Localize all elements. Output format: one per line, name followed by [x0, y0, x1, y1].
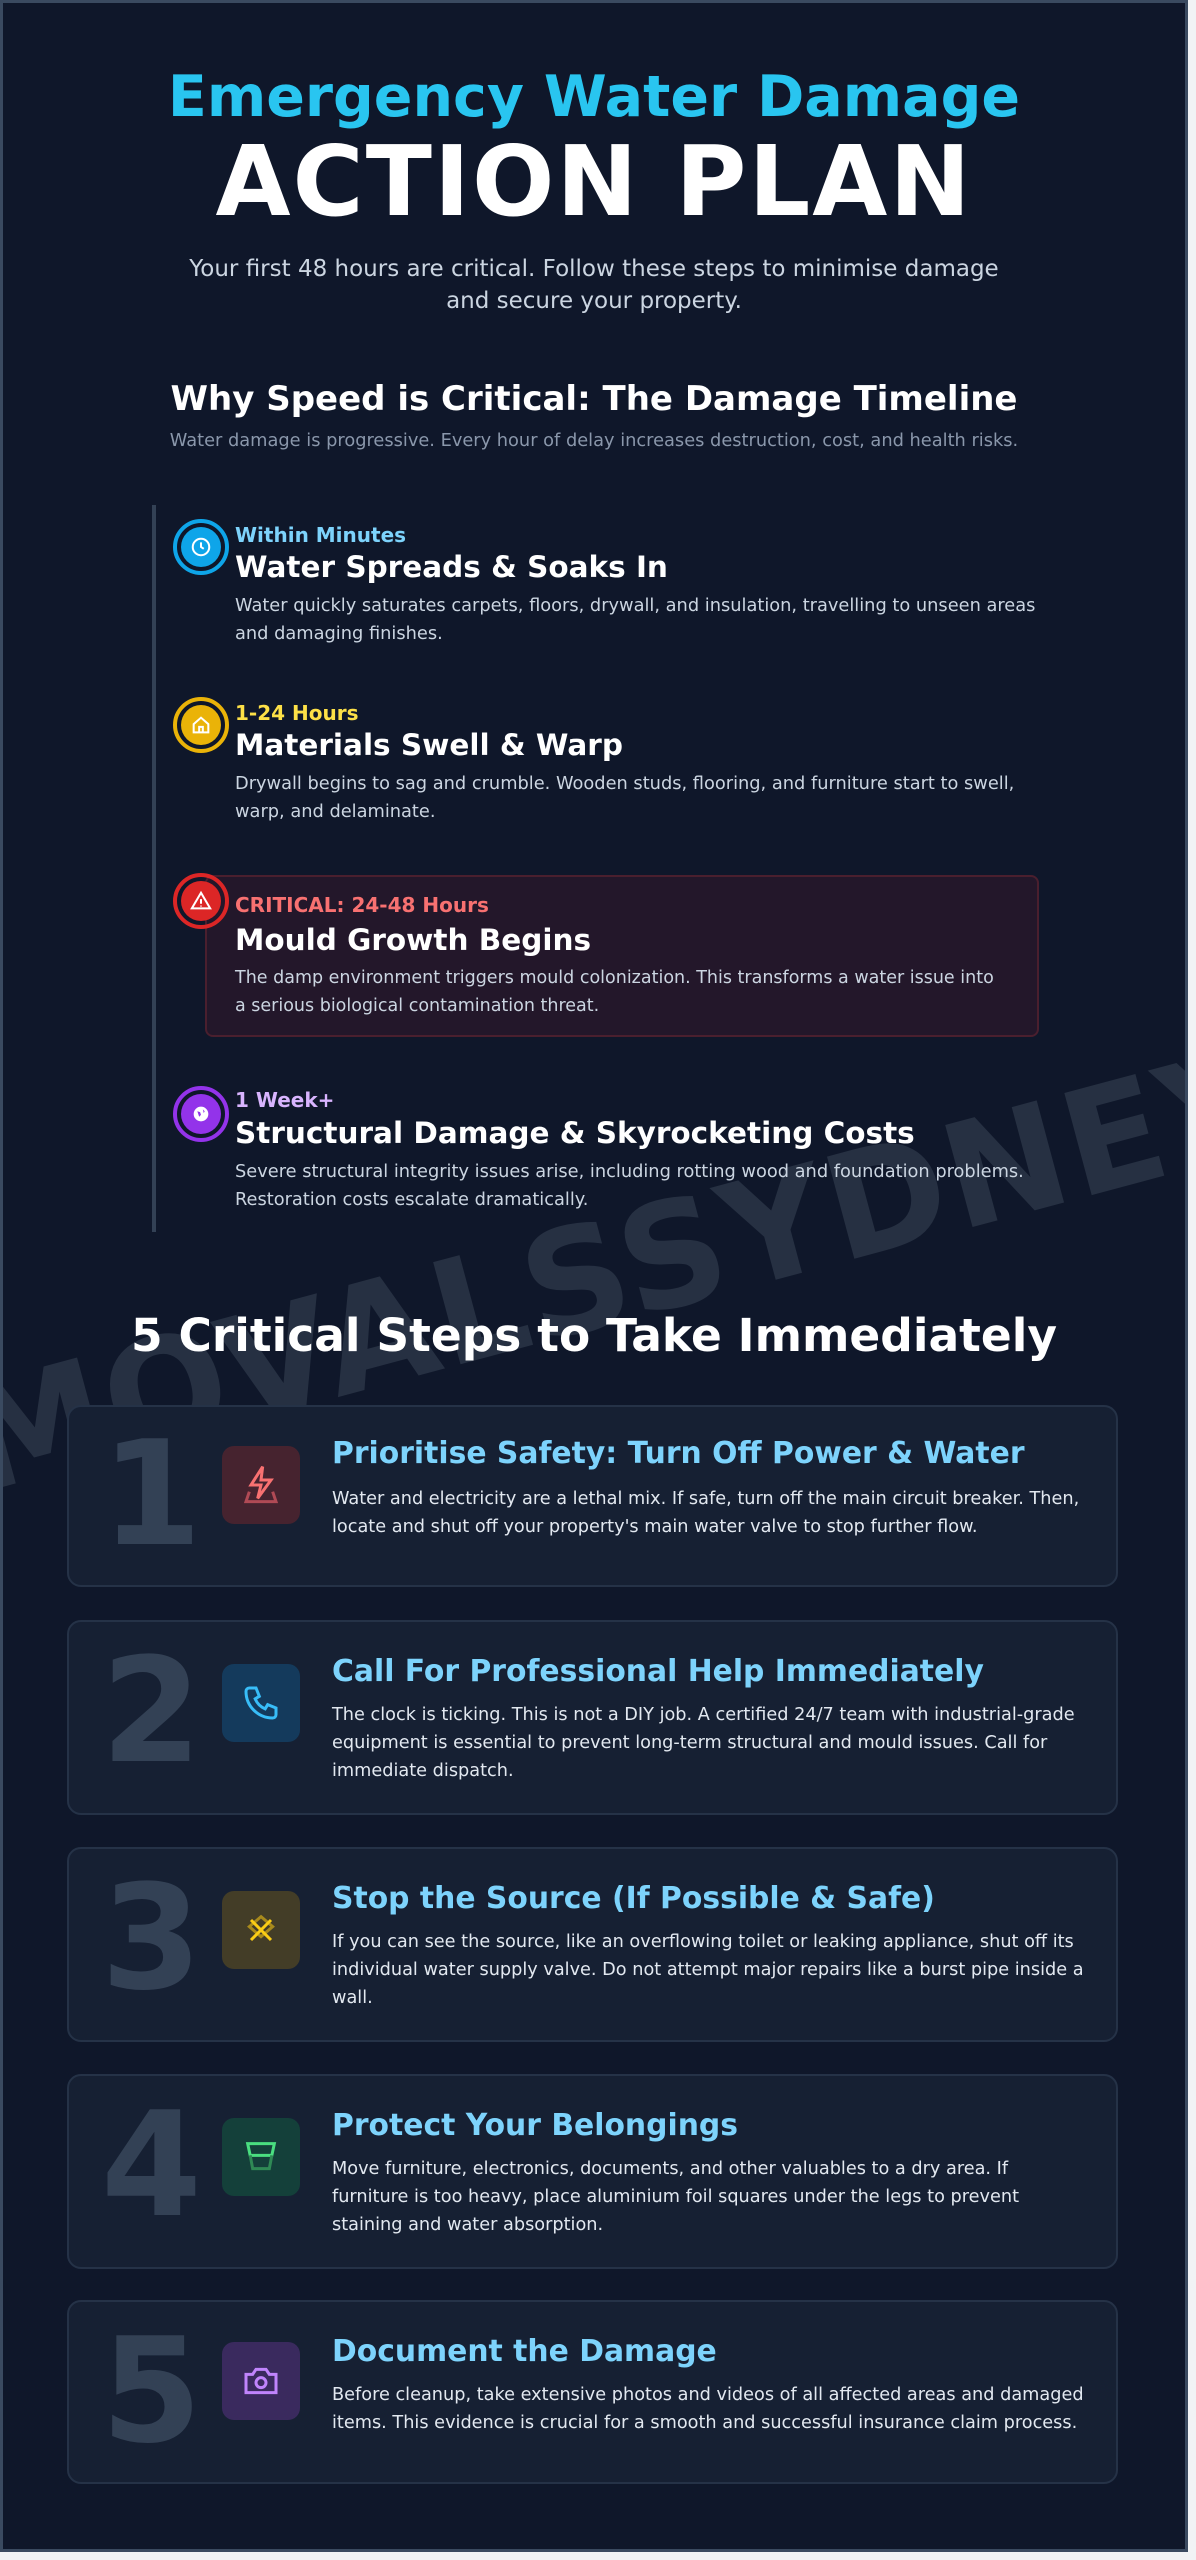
text: Before cleanup, take extensive photos and videos of all affected areas and damaged items. This evidence is crucial for a smooth and successful insurance claim process.	[332, 2385, 1084, 2433]
timeline item 1	[173, 519, 1035, 644]
icon: camera	[222, 2342, 300, 2420]
heading: Mould Growth Begins	[235, 923, 591, 957]
number: 4	[101, 2081, 202, 2250]
title: Emergency Water Damage	[168, 64, 1020, 130]
timeline intro text: Water damage is progressive. Every hour of delay increases destruction, cost, and health risks.	[170, 430, 1018, 451]
text: Drywall begins to sag and crumble. Wooden studs, flooring, and furniture start to swell, warp, and delaminate.	[235, 773, 1014, 822]
text: The damp environment triggers mould colonization. This transforms a water issue into	[235, 968, 994, 988]
icon: valve	[222, 1891, 300, 1969]
title: Document the Damage	[332, 2334, 717, 2369]
label: CRITICAL: 24-48 Hours	[235, 893, 489, 917]
number: 1	[101, 1410, 202, 1579]
timeline item 3: critical	[173, 873, 1039, 1037]
timeline line	[152, 505, 156, 1232]
text: Severe structural integrity issues arise, including rotting wood and foundation problems. Restoration costs escalate dramatically.	[235, 1161, 1024, 1210]
timeline item 4	[173, 1086, 1024, 1210]
icon: clock	[173, 519, 229, 575]
number: 3	[101, 1854, 202, 2023]
label: 1 Week+	[235, 1088, 334, 1112]
icon: box	[222, 2118, 300, 2196]
label: Within Minutes	[235, 523, 406, 547]
text: Water and electricity are a lethal mix. If safe, turn off the main circuit breaker. Then, locate and shut off your property's main water valve to stop further flow.	[332, 1489, 1079, 1537]
text: Water quickly saturates carpets, floors, drywall, and insulation, travelling to unseen areas and damaging finishes.	[235, 595, 1035, 644]
title: action plan: ACTION PLAN	[215, 125, 973, 238]
subtitle: Your first 48 hours are critical. Follow these steps to minimise damage and secure your property.	[189, 256, 999, 314]
text: a serious biological contamination threat.	[235, 996, 599, 1016]
title: Call For Professional Help Immediately	[332, 1654, 984, 1689]
icon: power	[222, 1446, 300, 1524]
step card 5	[67, 2300, 1118, 2484]
title: Stop the Source (If Possible & Safe)	[332, 1881, 935, 1916]
step card 2	[67, 1620, 1118, 1815]
step card 4	[67, 2074, 1118, 2269]
heading: Materials Swell & Warp	[235, 728, 623, 762]
critical box	[205, 875, 1039, 1037]
heading: Water Spreads & Soaks In	[235, 550, 668, 584]
title: Prioritise Safety: Turn Off Power & Water	[332, 1436, 1025, 1471]
heading: steps: 5 Critical Steps to Take Immediately	[131, 1309, 1057, 1362]
text: The clock is ticking. This is not a DIY job. A certified 24/7 team with industrial-grade equipment is essential to prevent long-term structural and mould issues. Call for immediate dispatch.	[332, 1705, 1075, 1781]
step card 1	[67, 1405, 1118, 1587]
text	[234, 968, 994, 1016]
timeline item 2	[173, 697, 1014, 822]
number: 5	[101, 2307, 202, 2476]
icon: warning	[173, 873, 229, 929]
number: 2	[101, 1627, 202, 1796]
text: If you can see the source, like an overflowing toilet or leaking appliance, shut off its individual water supply valve. Do not attempt major repairs like a burst pipe inside a wall.	[332, 1932, 1084, 2008]
icon: globe	[173, 1086, 229, 1142]
label: 1-24 Hours	[235, 701, 358, 725]
title: Protect Your Belongings	[332, 2108, 738, 2143]
text: Move furniture, electronics, documents, and other valuables to a dry area. If furniture is too heavy, place aluminium foil squares under the legs to prevent staining and water absorption.	[332, 2159, 1019, 2235]
heading: Structural Damage & Skyrocketing Costs	[235, 1116, 915, 1150]
heading: timeline: Why Speed is Critical: The Damage Timeline	[170, 379, 1018, 419]
icon: phone	[222, 1664, 300, 1742]
icon: house	[173, 697, 229, 753]
step card 3	[67, 1847, 1118, 2042]
